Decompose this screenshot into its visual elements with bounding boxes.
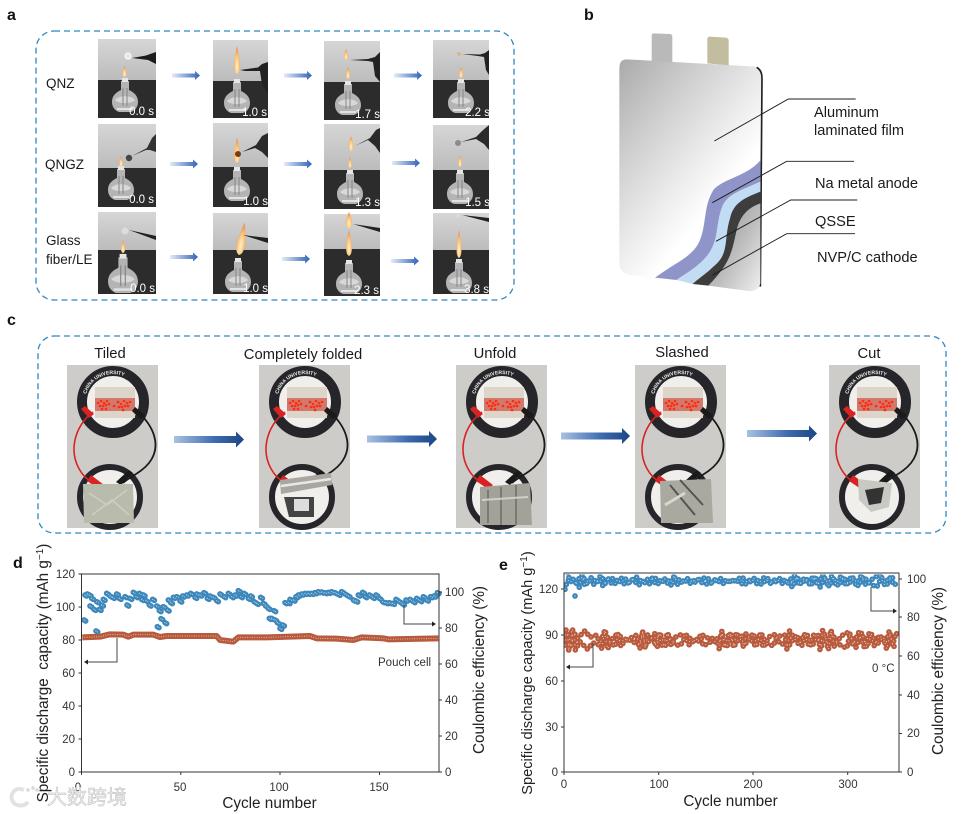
panel label b: b xyxy=(584,7,594,24)
left series arrow xyxy=(566,643,593,670)
x axis tick labels: 0 xyxy=(561,779,567,791)
series: Coulombic efficiency dots xyxy=(84,591,439,632)
photo: glass fiber 2.3 s: 2.3 s xyxy=(354,285,379,297)
photo: QNGZ 1.5 s: 1.5 s xyxy=(465,197,490,209)
chart e: 0 °C cycling xyxy=(519,551,947,810)
left axis tick labels: 60 xyxy=(545,676,558,688)
left tab xyxy=(652,33,672,63)
photo: QNGZ 1.0 s xyxy=(213,123,268,208)
right axis tick labels: 20 xyxy=(907,728,920,740)
photo: QNGZ 0.0 s xyxy=(98,124,156,207)
right axis tick labels: 0 xyxy=(907,767,913,779)
x axis tick labels: 200 xyxy=(743,779,763,791)
right axis tick labels: 60 xyxy=(445,659,458,671)
panel label e: e xyxy=(499,557,508,574)
left axis title: ) xyxy=(520,551,536,556)
left axis tick labels: 0 xyxy=(552,767,558,779)
right tab xyxy=(707,37,729,65)
annotation 0 °C: 0 °C xyxy=(872,663,894,675)
left axis tick labels: 120 xyxy=(56,569,75,581)
panel label c: c xyxy=(7,312,16,329)
right axis title: Coulombic efficiency (%) xyxy=(471,586,488,754)
cathode layer xyxy=(693,192,760,286)
label NVP/C cathode: NVP/C cathode xyxy=(817,250,918,266)
pouch body xyxy=(619,59,762,291)
left axis title: −1 xyxy=(519,556,530,568)
photo: glass fiber 1.0 s xyxy=(213,213,268,295)
arrows between flame photos xyxy=(170,71,422,266)
row label QNZ: QNZ xyxy=(46,76,74,91)
series: discharge capacity dots xyxy=(82,634,438,642)
anode layer xyxy=(655,160,761,280)
x axis title: Cycle number xyxy=(683,793,778,810)
right series arrow xyxy=(404,605,436,626)
photo: QNZ 1.0 s xyxy=(213,40,268,119)
plot frame and ticks xyxy=(78,574,442,775)
right series arrow xyxy=(871,587,897,614)
heading Tiled: Tiled xyxy=(94,346,126,362)
heading Cut: Cut xyxy=(857,346,881,362)
left axis tick labels: 30 xyxy=(545,722,558,734)
left axis tick labels: 60 xyxy=(62,668,75,680)
right axis tick labels: 0 xyxy=(445,767,451,779)
panel a: flame tests frame xyxy=(36,31,514,300)
photo: QNZ 2.2 s: 2.2 s xyxy=(465,107,490,119)
x axis title: Cycle number xyxy=(222,795,317,812)
left axis title: Specific discharge capacity (mAh g xyxy=(35,560,52,802)
annotation Pouch cell: Pouch cell xyxy=(378,657,431,669)
x axis tick labels: 100 xyxy=(649,779,669,791)
series: discharge capacity dots xyxy=(565,630,899,650)
photo: unfolded cell xyxy=(456,365,547,528)
right axis tick labels: 40 xyxy=(907,690,920,702)
photo: QNGZ 1.5 s xyxy=(433,125,490,209)
photo: QNGZ 1.3 s xyxy=(324,124,380,209)
right axis tick labels: 80 xyxy=(445,623,458,635)
right axis tick labels: 60 xyxy=(907,651,920,663)
photo: QNGZ 0.0 s: 0.0 s xyxy=(129,194,154,206)
left axis title: Specific discharge capacity (mAh g xyxy=(520,568,536,795)
photo: glass fiber 0.0 s xyxy=(98,212,156,295)
photo: glass fiber 2.3 s xyxy=(324,212,380,297)
watermark logo and text xyxy=(12,781,127,810)
photo: slashed cell xyxy=(635,365,726,528)
x axis tick labels: 300 xyxy=(838,779,858,791)
left axis tick labels: 100 xyxy=(56,602,75,614)
exposed inner corner xyxy=(708,203,760,291)
arrow: slashed to cut xyxy=(747,426,817,442)
x axis tick labels: 50 xyxy=(174,782,186,794)
photo: glass fiber 1.0 s: 1.0 s xyxy=(243,283,268,295)
left axis tick labels: 40 xyxy=(62,701,75,713)
photo: QNZ 2.2 s xyxy=(433,40,490,119)
photo: QNZ 0.0 s xyxy=(98,39,156,118)
x axis tick labels: 100 xyxy=(269,782,289,794)
photo: glass fiber 3.8 s: 3.8 s xyxy=(464,284,489,296)
panel c: flexibility test frame xyxy=(38,336,946,533)
watermark logo and text: 大数跨境 xyxy=(47,781,127,810)
left axis tick labels: 80 xyxy=(62,635,75,647)
x axis tick labels: 0 xyxy=(75,782,81,794)
leader lines xyxy=(712,99,857,275)
arrow: tiled to folded xyxy=(174,432,244,448)
photo: glass fiber 3.8 s xyxy=(433,213,489,296)
heading Completely folded: Completely folded xyxy=(244,347,362,363)
cell edge xyxy=(757,67,762,287)
photo: glass fiber 0.0 s: 0.0 s xyxy=(130,283,155,295)
photo: QNGZ 1.0 s: 1.0 s xyxy=(243,196,268,208)
arrow: folded to unfold xyxy=(367,431,437,447)
right axis tick labels: 40 xyxy=(445,695,458,707)
panel label a: a xyxy=(7,7,16,24)
left axis tick labels: 120 xyxy=(539,584,558,596)
arrow: unfold to slashed xyxy=(561,428,630,444)
right axis tick labels: 100 xyxy=(907,574,926,586)
photo: QNZ 0.0 s: 0.0 s xyxy=(129,106,154,118)
label aluminum laminated film: Aluminum xyxy=(814,105,879,121)
heading Unfold: Unfold xyxy=(474,346,516,362)
photo: tiled cell powering LEDs xyxy=(67,365,158,528)
x axis tick labels: 150 xyxy=(369,782,389,794)
photo: QNZ 1.7 s xyxy=(324,41,380,121)
row label Glass fiber/LE: fiber/LE xyxy=(46,252,93,267)
right axis title: Coulombic efficiency (%) xyxy=(930,587,947,755)
photo: QNGZ 1.3 s: 1.3 s xyxy=(355,197,380,209)
QSSE layer xyxy=(677,182,760,284)
series: Coulombic efficiency dots xyxy=(565,573,898,596)
panel label d: d xyxy=(13,555,23,572)
photo: folded cell xyxy=(259,365,350,528)
left axis title: −1 xyxy=(35,548,46,560)
heading Slashed: Slashed xyxy=(655,345,709,361)
row label QNGZ: QNGZ xyxy=(45,157,84,172)
row label Glass fiber/LE: Glass xyxy=(46,233,81,248)
left series arrow xyxy=(84,638,117,664)
left axis title: ) xyxy=(35,544,52,549)
left axis tick labels: 90 xyxy=(545,630,558,642)
right axis tick labels: 80 xyxy=(907,612,920,624)
photo: cut cell xyxy=(829,365,920,528)
left axis tick labels: 20 xyxy=(62,734,75,746)
right axis tick labels: 20 xyxy=(445,731,458,743)
photo: QNZ 1.0 s: 1.0 s xyxy=(242,107,267,119)
plot frame and ticks xyxy=(561,573,902,775)
label Na metal anode: Na metal anode xyxy=(815,176,918,192)
label QSSE: QSSE xyxy=(815,214,856,230)
right axis tick labels: 100 xyxy=(445,587,464,599)
left axis tick labels: 0 xyxy=(69,767,75,779)
panel b: pouch cell schematic xyxy=(619,33,857,291)
photo: QNZ 1.7 s: 1.7 s xyxy=(355,109,380,121)
label aluminum laminated film: laminated film xyxy=(814,123,904,139)
chart d: pouch cell cycling xyxy=(35,544,488,812)
